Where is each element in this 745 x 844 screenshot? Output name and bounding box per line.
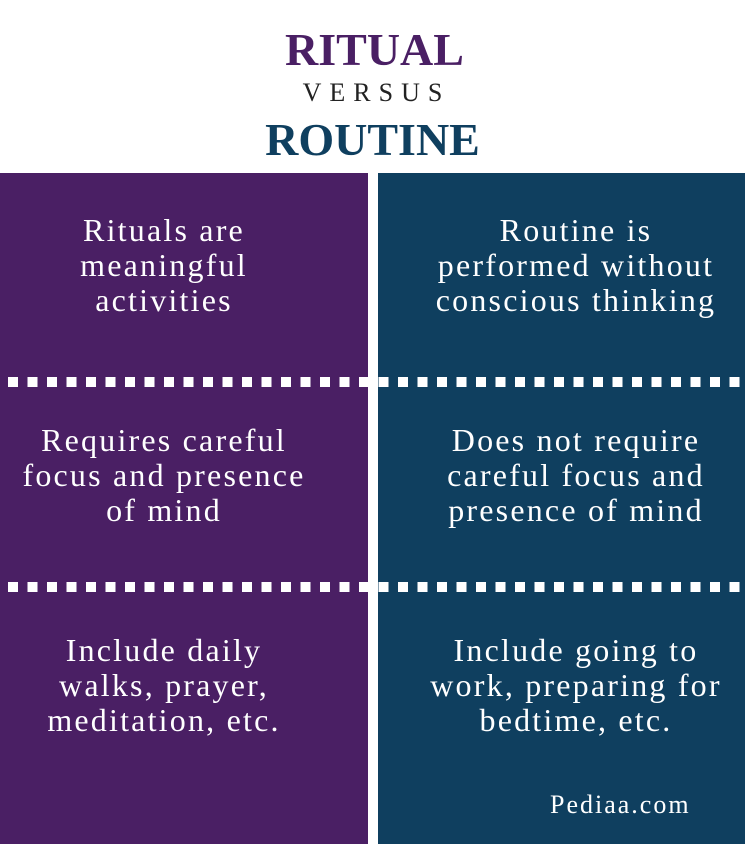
text: ritual meaning xyxy=(80,212,248,318)
panel: routine column xyxy=(378,173,745,844)
title: ritual: RITUAL xyxy=(285,24,464,75)
text: routine focus xyxy=(447,422,705,528)
panel: ritual column xyxy=(0,173,368,844)
text: ritual meaning: meaningful xyxy=(80,247,248,283)
text: routine meaning: performed without xyxy=(438,247,714,283)
text: routine examples: bedtime, etc. xyxy=(480,702,672,738)
text: ritual examples: Include daily xyxy=(66,632,262,668)
logo: pediaa: Pediaa.com xyxy=(550,790,691,819)
text: ritual meaning: Rituals are xyxy=(83,212,245,248)
text: routine examples: work, preparing for xyxy=(430,667,722,703)
text: routine focus: presence of mind xyxy=(448,492,704,528)
text: routine meaning xyxy=(436,212,716,318)
title: versus: VERSUS xyxy=(303,78,450,107)
text: routine meaning: conscious thinking xyxy=(436,282,716,318)
title: routine: ROUTINE xyxy=(265,114,480,165)
text: routine examples: Include going to xyxy=(454,632,698,668)
text: ritual examples xyxy=(47,632,281,738)
text: ritual focus xyxy=(22,422,306,528)
text: ritual meaning: activities xyxy=(95,282,233,318)
text: routine examples xyxy=(430,632,722,738)
text: ritual focus: Requires careful xyxy=(41,422,287,458)
text: ritual examples: meditation, etc. xyxy=(47,702,281,738)
text: routine focus: Does not require xyxy=(452,422,700,458)
text: routine focus: careful focus and xyxy=(447,457,705,493)
text: ritual focus: focus and presence xyxy=(22,457,306,493)
text: ritual focus: of mind xyxy=(106,492,222,528)
text: routine meaning: Routine is xyxy=(500,212,652,248)
text: ritual examples: walks, prayer, xyxy=(59,667,269,703)
